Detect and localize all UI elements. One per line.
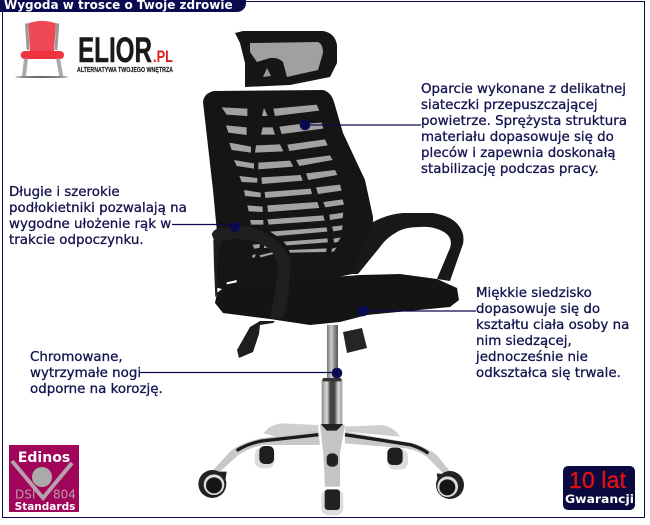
badge: Edinos DSI 804 Standards: 804 [53,488,76,502]
text: backrest: Oparcie wykonane z delikatnej siateczki przepuszczającej powietrze. Sprężysta struktura materiału dopasowuje się do pleców i zapewnia doskonałą stabilizację podczas pracy. [421,82,627,177]
badge: 10 years warranty [563,466,635,510]
left armrest [212,227,291,318]
pointer: armrest [172,222,240,232]
badge: 10 years warranty: Gwarancji [565,492,634,506]
back wheels [255,447,275,468]
badge: 10 years warranty: 10 lat [569,467,627,493]
height knob [343,328,367,353]
pointer: legs [140,368,342,378]
text: seat: Miękkie siedzisko dopasowuje się do kształtu ciała osoby na nim siedzącej, jednocześnie nie odkształca się trwale. [476,286,629,381]
badge: Edinos DSI 804 Standards: DSI [15,488,35,502]
seat [215,274,459,325]
text: armrests: Długie i szerokie podłokietniki pozwalają na wygodne ułożenie rąk w trakcie odpoczynku. [9,185,187,248]
logo: Elior [15,21,173,78]
logo: Elior: .PL [153,47,173,66]
badge: Edinos DSI 804 Standards [9,445,79,513]
back legs [263,423,318,437]
text: legs: Chromowane, wytrzymałe nogi odporne na korozję. [30,350,163,397]
headrest [235,31,337,87]
icon: red chair [15,21,68,78]
star base [198,378,464,515]
sleeve [322,379,342,427]
badge: Edinos DSI 804 Standards: Standards [15,501,75,513]
tilt lever [237,321,275,358]
backrest [203,90,373,290]
right armrest [350,213,464,281]
pointer: seat [358,306,476,316]
badge: Edinos DSI 804 Standards: Edinos [18,450,70,466]
pointer: backrest [300,120,421,130]
logo: Elior: ALTERNATYWA TWOJEGO WNĘTRZA [77,65,173,74]
logo: Elior: ELIOR [78,31,152,70]
gas lift column [327,325,338,381]
front legs [212,430,320,472]
